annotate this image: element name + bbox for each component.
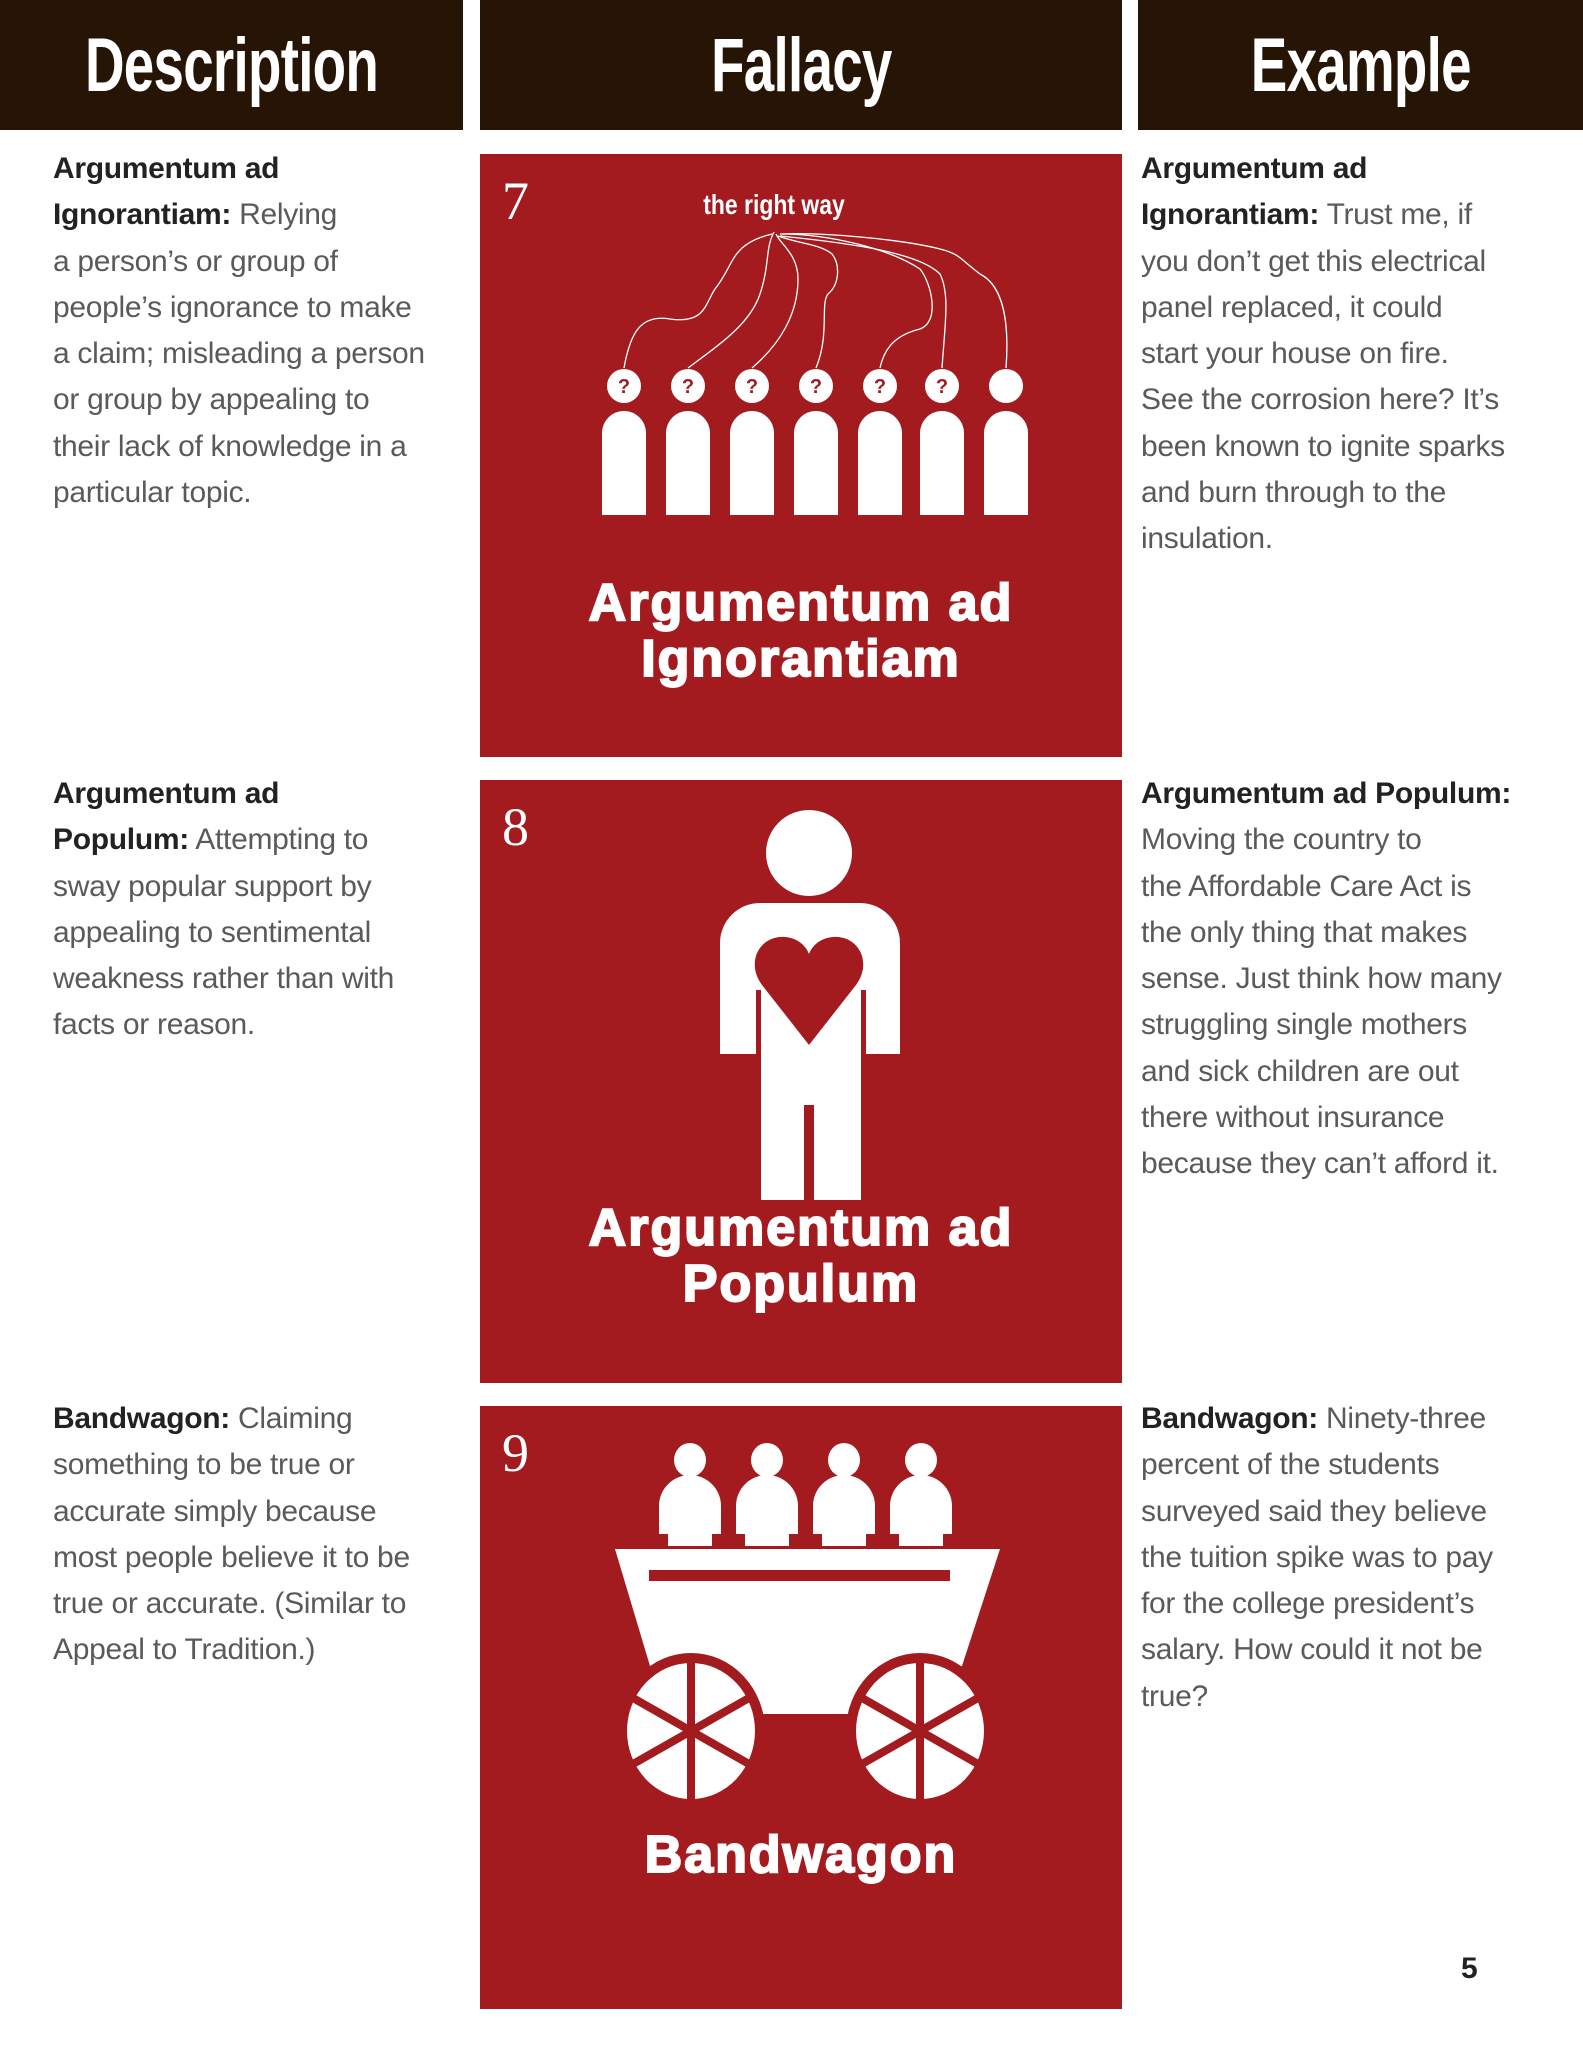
header: Fallacy	[480, 0, 1122, 130]
panel: fallacy 8	[480, 780, 1122, 1383]
icon: bandwagon	[615, 1443, 1000, 1799]
text: description 9: Appeal to Tradition.)	[53, 1633, 315, 1666]
title 7: Ignorantiam	[641, 630, 961, 688]
text: example 9: the tuition spike was to pay	[1141, 1541, 1493, 1574]
text: example 7: and burn through to the	[1141, 476, 1446, 509]
text: description 7: a claim; misleading a person	[53, 337, 425, 370]
header: Example	[1138, 0, 1583, 130]
text: description 9: true or accurate. (Similar to	[53, 1587, 406, 1620]
title 8: Argumentum ad	[589, 1199, 1013, 1257]
text: description 7	[53, 152, 425, 509]
text: description 7: Ignorantiam: Relying	[53, 198, 337, 231]
text: example 9: percent of the students	[1141, 1448, 1439, 1481]
text: example 7: panel replaced, it could	[1141, 291, 1442, 324]
icon: ignorant crowd: ?	[810, 376, 822, 398]
icon: person with heart	[720, 810, 900, 1200]
text: description 7: a person’s or group of	[53, 245, 338, 278]
text: example 9: true?	[1141, 1680, 1208, 1713]
icon: ignorant crowd: ?	[746, 376, 758, 398]
text: description 8	[53, 777, 394, 1041]
text: description 7: people’s ignorance to make	[53, 291, 412, 324]
title 8: Populum	[683, 1255, 919, 1313]
text: example 7: Argumentum ad	[1141, 152, 1367, 185]
text: description 7: Argumentum ad	[53, 152, 279, 185]
text: example 7: been known to ignite sparks	[1141, 430, 1505, 463]
text: description 9: accurate simply because	[53, 1495, 376, 1528]
text: example 9: surveyed said they believe	[1141, 1495, 1487, 1528]
number 8: 8	[502, 797, 529, 857]
panel: fallacy 9	[480, 1406, 1122, 2009]
icon: ignorant crowd: ?	[936, 376, 948, 398]
icon: ignorant crowd: ?	[874, 376, 886, 398]
text: example 7: Ignorantiam: Trust me, if	[1141, 198, 1472, 231]
text: description 7: particular topic.	[53, 476, 251, 509]
text: example 8	[1141, 777, 1511, 1180]
text: description 7: their lack of knowledge in a	[53, 430, 406, 463]
icon: ignorant crowd	[602, 190, 1028, 515]
header: Description	[0, 0, 463, 130]
text: example 7	[1141, 152, 1505, 555]
text: example 8: the only thing that makes	[1141, 916, 1467, 949]
text: example 7: start your house on fire.	[1141, 337, 1449, 370]
number 9: 9	[502, 1423, 529, 1483]
title 7	[588, 574, 1013, 688]
text: description 7: or group by appealing to	[53, 383, 369, 416]
title 9: Bandwagon	[645, 1826, 957, 1884]
text: example 9: for the college president’s	[1141, 1587, 1474, 1620]
title 8	[588, 1199, 1013, 1313]
text: example 8: the Affordable Care Act is	[1141, 870, 1471, 903]
text: description 9: Bandwagon: Claiming	[53, 1402, 352, 1435]
text: example 8: Argumentum ad Populum:	[1141, 777, 1511, 810]
header: Example: Example	[1250, 22, 1471, 108]
text: description 9: most people believe it to be	[53, 1541, 410, 1574]
text: description 8: appealing to sentimental	[53, 916, 371, 949]
text: description 8: weakness rather than with	[53, 962, 394, 995]
text: description 8: Argumentum ad	[53, 777, 279, 810]
text: example 8: and sick children are out	[1141, 1055, 1459, 1088]
text: example 7: insulation.	[1141, 522, 1273, 555]
panel: fallacy 7	[480, 154, 1122, 757]
header: Description: Description	[85, 22, 378, 108]
text: description 8: sway popular support by	[53, 870, 371, 903]
text: description 9: something to be true or	[53, 1448, 355, 1481]
text: example 7: you don’t get this electrical	[1141, 245, 1486, 278]
number 7: 7	[502, 171, 529, 231]
icon: ignorant crowd: ?	[682, 376, 694, 398]
text: example 8: struggling single mothers	[1141, 1008, 1467, 1041]
text: example 8: there without insurance	[1141, 1101, 1444, 1134]
text: example 8: sense. Just think how many	[1141, 962, 1502, 995]
page number: 5	[1461, 1952, 1478, 1985]
text: example 9: Bandwagon: Ninety-three	[1141, 1402, 1486, 1435]
text: description 8: Populum: Attempting to	[53, 823, 368, 856]
icon: ignorant crowd: ?	[618, 376, 630, 398]
text: example 9: salary. How could it not be	[1141, 1633, 1483, 1666]
text: example 9	[1141, 1402, 1493, 1713]
text: example 8: because they can’t afford it.	[1141, 1147, 1499, 1180]
header: Fallacy: Fallacy	[711, 22, 891, 108]
title 7: Argumentum ad	[589, 574, 1013, 632]
text: description 8: facts or reason.	[53, 1008, 255, 1041]
text: description 9	[53, 1402, 410, 1666]
text: example 7: See the corrosion here? It’s	[1141, 383, 1499, 416]
text: example 8: Moving the country to	[1141, 823, 1422, 856]
icon: ignorant crowd: the right way	[703, 190, 845, 221]
